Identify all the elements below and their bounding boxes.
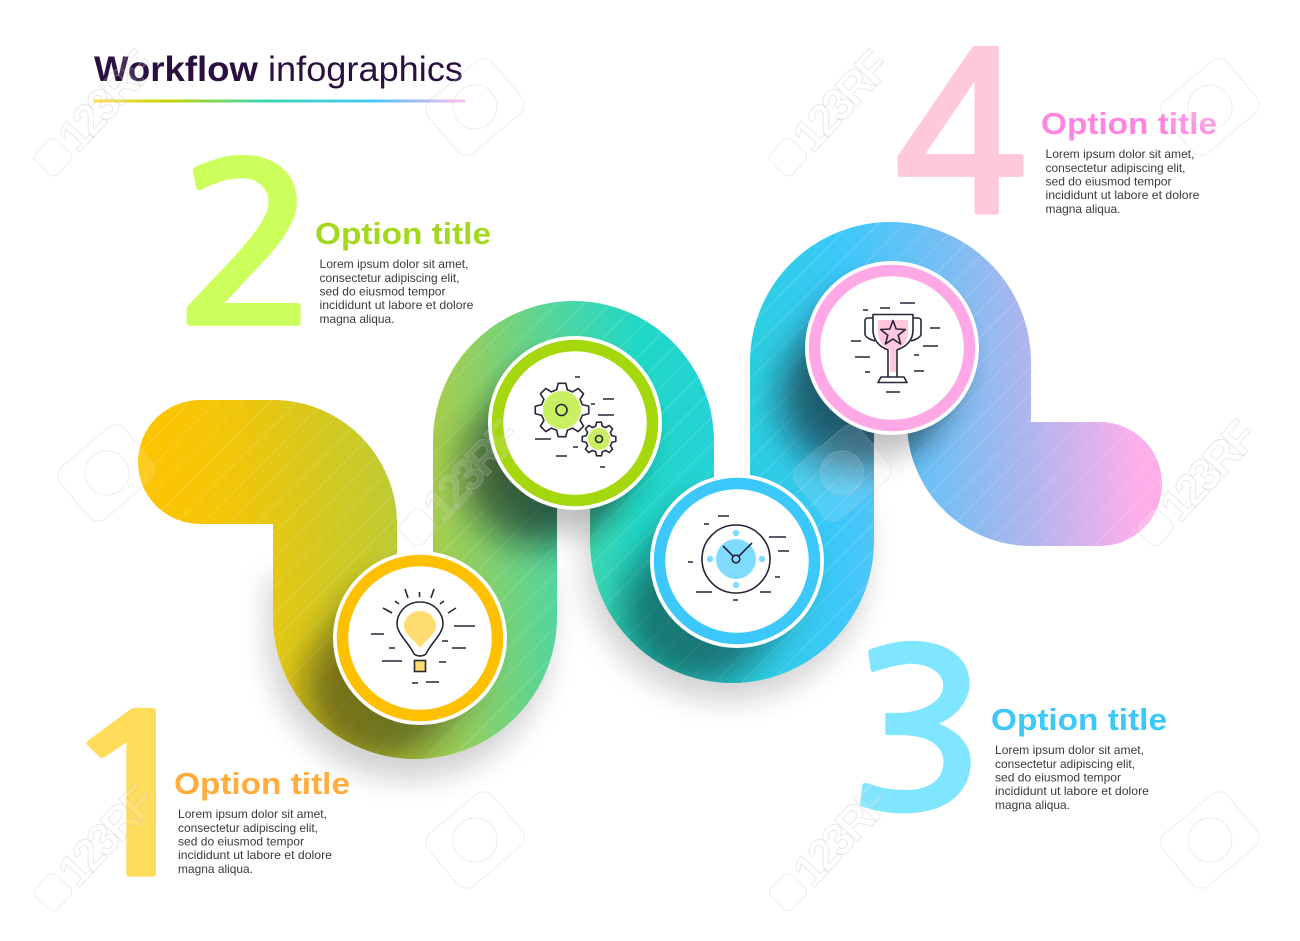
option title 4: Option title [1041,106,1217,141]
description 4: consectetur adipiscing elit, [1046,161,1186,175]
description 1: Lorem ipsum dolor sit amet, [178,807,327,821]
watermark stamps: 123RF [783,775,900,896]
option title 3: Option title [991,702,1167,737]
title [94,50,465,102]
description 1: incididunt ut labore et dolore [178,848,332,862]
option title 1: Option title [174,766,350,801]
step 1 label [51,690,350,910]
step 2 label [172,139,491,359]
description 2 [320,257,474,326]
description 4: magna aliqua. [1046,202,1120,216]
description 2: consectetur adipiscing elit, [320,271,460,285]
description 4: incididunt ut labore et dolore [1046,188,1200,202]
workflow ribbon [130,215,1170,765]
description 1: consectetur adipiscing elit, [178,821,318,835]
number 4: 4 [891,27,1030,247]
icon: clock [688,516,789,600]
description 2: sed do eiusmod tempor [320,284,446,298]
number 3: 3 [846,626,990,845]
watermark stamps: 123RF [783,40,900,161]
description 3: sed do eiusmod tempor [995,770,1121,784]
step 4 circle [805,261,979,435]
step 2 circle [488,336,662,510]
description 4: Lorem ipsum dolor sit amet, [1046,147,1194,161]
description 4: sed do eiusmod tempor [1046,174,1172,188]
number 2: 2 [172,139,323,359]
title: infographics [268,50,463,89]
watermark stamps: 123RF [48,40,165,161]
description 3: incididunt ut labore et dolore [995,784,1149,798]
step 3 circle [650,474,824,648]
step 4 label [891,27,1217,247]
icon: trophy [851,303,940,392]
description 2: magna aliqua. [320,312,394,326]
number 1: 1 [51,690,219,910]
description 2: incididunt ut labore et dolore [320,298,474,312]
watermark stamps: 123RF [1150,410,1267,531]
description 3 [995,743,1149,812]
description 3: Lorem ipsum dolor sit amet, [995,743,1144,757]
icon: light bulb [371,589,475,683]
watermark stamps: 123RF [413,410,530,531]
description 2: Lorem ipsum dolor sit amet, [320,257,468,271]
description 4 [1046,147,1200,216]
description 3: magna aliqua. [995,798,1070,812]
description 1: sed do eiusmod tempor [178,834,304,848]
ribbon ground shadow [329,508,806,718]
option title 2: Option title [315,216,491,251]
description 1: magna aliqua. [178,862,253,876]
step 3 label [846,626,1167,845]
step 1 circle [333,551,507,725]
circle shadows on white [560,365,887,458]
description 1 [178,807,332,876]
icon: gears [535,377,616,467]
circle shadows on ribbon [380,362,880,688]
description 3: consectetur adipiscing elit, [995,757,1135,771]
watermark stamps: 123RF [48,775,165,896]
title: Workflow [94,50,259,89]
